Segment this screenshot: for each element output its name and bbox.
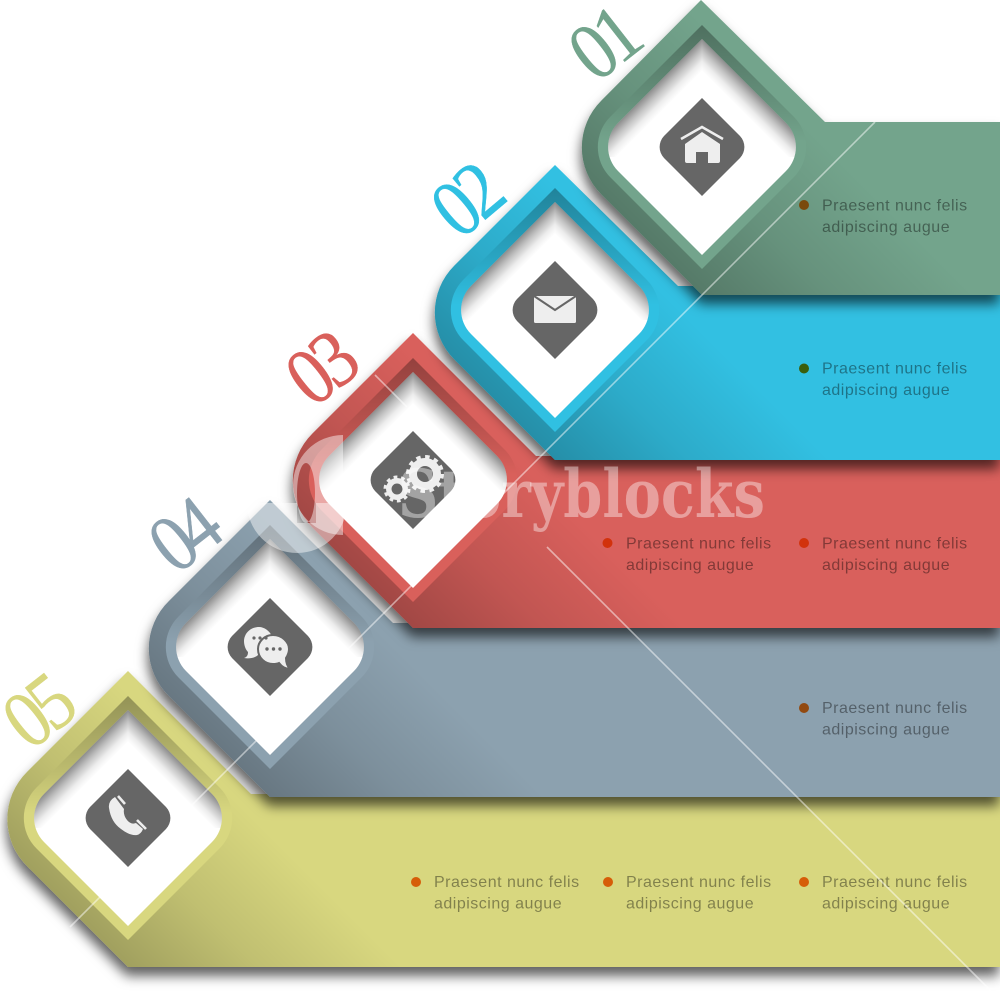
text block: step 5 left — [411, 874, 580, 912]
panel: step 2 blue band — [435, 165, 1000, 460]
panel: step 5 yellow band — [7, 671, 1000, 967]
text block: step 5 right: Praesent nunc felis — [822, 874, 968, 891]
text block: step 3 left: Praesent nunc felis — [626, 536, 772, 552]
band and frame: step 1 — [582, 0, 1000, 295]
text block: step 5 middle — [603, 874, 772, 912]
band and frame: step 5 — [7, 671, 1000, 967]
text block: step 4: adipiscing augue — [822, 722, 950, 738]
watermark: Storyblocks — [398, 455, 765, 533]
text block: step 3 right: adipiscing augue — [822, 557, 950, 574]
band and frame: step 3 — [293, 333, 1000, 628]
text block: step 5 left: Praesent nunc felis — [434, 874, 580, 891]
text block: step 5 left: adipiscing augue — [434, 896, 562, 912]
number 04: 04 — [131, 478, 239, 590]
icon: envelope — [513, 261, 597, 359]
text block: step 4: Praesent nunc felis — [822, 700, 968, 717]
icon: gears — [371, 431, 455, 529]
text block: step 3 right: Praesent nunc felis — [822, 536, 968, 552]
band and frame: step 2 — [435, 165, 1000, 460]
panel: step 1 green band — [582, 0, 1000, 295]
number 02: 02 — [413, 145, 520, 255]
icon: chat bubbles — [228, 598, 312, 696]
number 03: 03 — [268, 312, 374, 423]
text block: step 5 middle: adipiscing augue — [626, 896, 754, 912]
text block: step 3 left: adipiscing augue — [626, 557, 754, 574]
text block: step 2 — [799, 360, 968, 399]
text block: step 2: Praesent nunc felis — [822, 360, 968, 378]
icon: phone — [86, 769, 170, 867]
text block: step 3 left — [602, 536, 772, 574]
band and frame: step 4 — [149, 500, 1000, 797]
text block: step 5 right — [799, 874, 968, 912]
text block: step 3 right — [799, 536, 968, 574]
panel: step 3 red band — [293, 333, 1000, 628]
icon: house — [660, 98, 744, 196]
text block: step 2: adipiscing augue — [822, 382, 950, 399]
text block: step 1 — [799, 198, 968, 236]
panel: step 4 grey band — [149, 500, 1000, 797]
text block: step 5 middle: Praesent nunc felis — [626, 874, 772, 891]
text block: step 5 right: adipiscing augue — [822, 896, 950, 912]
text block: step 4 — [799, 700, 968, 738]
text block: step 1: adipiscing augue — [822, 219, 950, 236]
text block: step 1: Praesent nunc felis — [822, 198, 968, 214]
